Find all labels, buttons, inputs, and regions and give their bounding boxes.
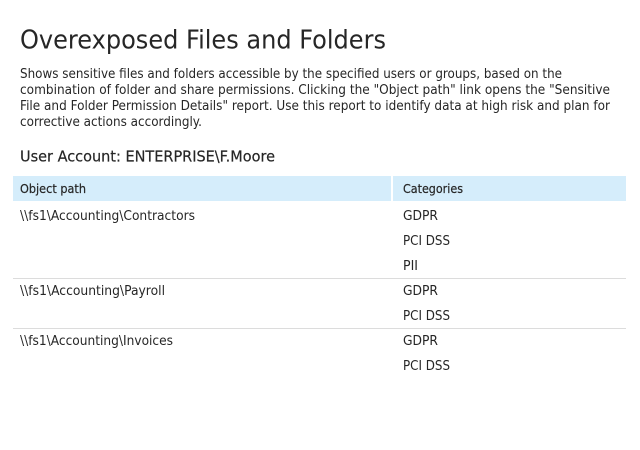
table header: categories: Categories — [403, 182, 463, 196]
row: Contractors: PCI DSS — [403, 234, 450, 249]
description text block: Shows sensitive files and folders accessible by the specified users or groups, based on the — [20, 67, 562, 82]
description text block: corrective actions accordingly. — [20, 115, 202, 130]
row: Payroll — [20, 284, 450, 324]
table header: object path: Object path — [20, 182, 86, 196]
row: Contractors: \\fs1\Accounting\Contractors — [20, 209, 195, 224]
description text block: File and Folder Permission Details" report. Use this report to identify data at high risk and plan for — [20, 99, 611, 114]
table header: object path — [13, 176, 391, 201]
row: Invoices: PCI DSS — [403, 359, 450, 374]
row: Contractors: PII — [403, 259, 418, 274]
row: Invoices: GDPR — [403, 334, 438, 349]
user account heading: User Account: ENTERPRISE\F.Moore — [20, 148, 275, 166]
description text block: combination of folder and share permissions. Clicking the "Object path" link opens the "Sensitive — [20, 83, 610, 98]
row: Contractors — [20, 209, 450, 274]
row: Payroll: PCI DSS — [403, 309, 450, 324]
table header: categories — [393, 176, 626, 201]
description text block — [20, 67, 611, 130]
table — [13, 176, 626, 374]
title: Overexposed Files and Folders — [20, 26, 386, 56]
row: Invoices — [20, 334, 450, 374]
row: Payroll: GDPR — [403, 284, 438, 299]
row: Contractors: GDPR — [403, 209, 438, 224]
row: Payroll: \\fs1\Accounting\Payroll — [20, 284, 165, 299]
row: Invoices: \\fs1\Accounting\Invoices — [20, 334, 173, 349]
